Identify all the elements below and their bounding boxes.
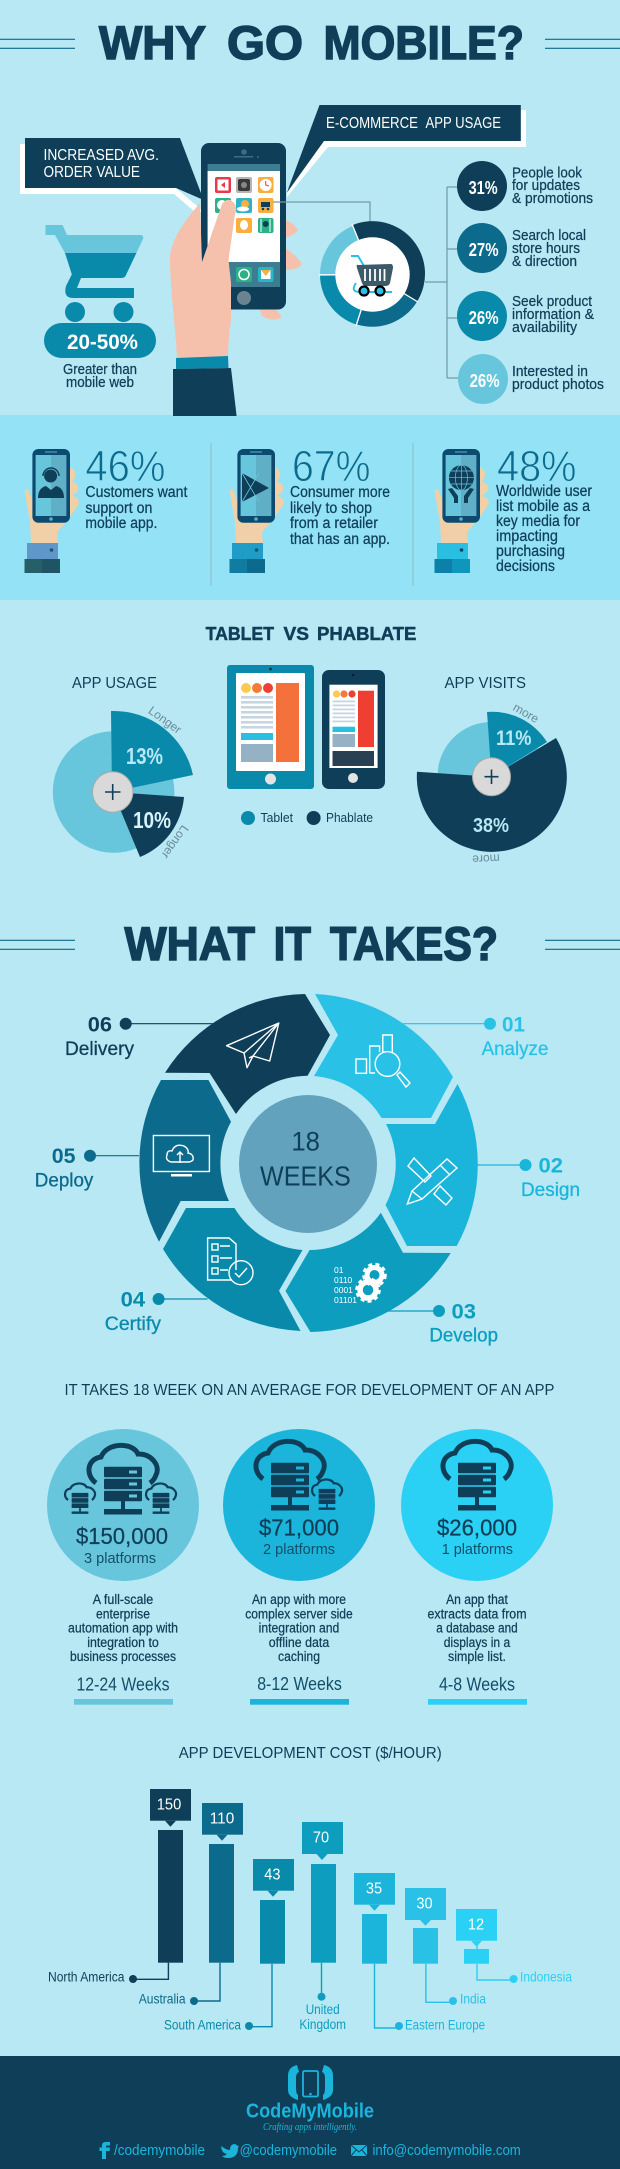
text: 48% worldwide user: key media for bbox=[496, 513, 580, 530]
bar: australia 110 bbox=[139, 1803, 243, 2007]
label: 06 delivery: Delivery bbox=[65, 1039, 135, 1060]
text: 48% worldwide user bbox=[496, 442, 592, 575]
text: 48% worldwide user: 48% bbox=[497, 442, 576, 491]
bar: eastern europe 35 bbox=[354, 1873, 485, 2033]
icon: hand with play phone bbox=[230, 449, 284, 573]
label: 06 delivery bbox=[65, 1014, 214, 1060]
bar: india 30: India bbox=[460, 1992, 486, 2007]
logo: codemymobile bbox=[246, 2065, 374, 2133]
label: 05 deploy: Deploy bbox=[35, 1171, 94, 1192]
bar: india 30 bbox=[405, 1888, 486, 2007]
description: complex server side: offline data bbox=[269, 1635, 330, 1650]
icon: three cloud servers bbox=[65, 1445, 176, 1514]
app icons bbox=[215, 177, 274, 282]
text: 48% worldwide user: decisions bbox=[496, 558, 555, 575]
stat: 31% updates: 31% bbox=[469, 178, 498, 198]
chart: app usage pie: Longer bbox=[146, 703, 184, 737]
stat: 26% product photos: Interested in bbox=[512, 363, 588, 380]
description: complex server side: caching bbox=[278, 1649, 320, 1664]
text: 67% consumer more likely: 67% bbox=[292, 442, 370, 491]
bar: south america 43: South America bbox=[164, 2018, 241, 2033]
chart: cost per hour bars bbox=[48, 1789, 572, 2033]
stat: 26% product photos: product photos bbox=[512, 376, 604, 393]
card: 2 platforms: $71,000 bbox=[259, 1515, 339, 1541]
text: 48% worldwide user: purchasing bbox=[496, 543, 565, 560]
text: 46% customers want support: Customers want bbox=[85, 484, 188, 501]
heading: app visits: APP VISITS bbox=[444, 675, 526, 692]
description: extracts data: simple list. bbox=[448, 1649, 506, 1664]
description: extracts data bbox=[428, 1592, 526, 1664]
chart: app usage pie: 13% bbox=[126, 743, 163, 769]
text: 67% consumer more likely: likely to shop bbox=[290, 500, 372, 517]
title: why go mobile: WHY bbox=[99, 16, 206, 69]
segment: deploy bbox=[139, 1080, 231, 1242]
text: greater than mobile web: Greater than bbox=[63, 362, 137, 378]
segment: develop: 0001 bbox=[334, 1285, 353, 1295]
description: full-scale app bbox=[68, 1592, 178, 1664]
label: 04 certify bbox=[105, 1289, 208, 1335]
card: 1 platform: 1 platforms bbox=[442, 1541, 513, 1558]
bar: north america 150 bbox=[48, 1789, 191, 1985]
label: 03 develop: Develop bbox=[429, 1326, 498, 1347]
contact: email: info@codemymobile.com bbox=[372, 2142, 521, 2159]
phone bbox=[201, 143, 286, 310]
chart: e-commerce donut bbox=[319, 221, 425, 327]
section: development time and cost bbox=[47, 1382, 572, 2033]
text: 48% worldwide user: impacting bbox=[496, 528, 558, 545]
logo: codemymobile: CodeMyMobile bbox=[246, 2100, 374, 2122]
stat: 31% updates: for updates bbox=[512, 177, 580, 194]
contact: twitter: @codemymobile bbox=[240, 2142, 337, 2159]
logo: codemymobile: Crafting apps intelligently. bbox=[263, 2122, 357, 2133]
chart: app visits pie: more bbox=[511, 700, 542, 726]
bar: india 30: 30 bbox=[416, 1895, 433, 1912]
stat: 26% product info bbox=[457, 291, 594, 341]
bar: united kingdom 70: 70 bbox=[313, 1829, 329, 1846]
legend: tablet and phablate: Tablet bbox=[260, 810, 293, 825]
stat: 27% store hours: 27% bbox=[469, 240, 499, 260]
icon: plus hub bbox=[472, 758, 510, 796]
sleeve bbox=[173, 356, 236, 415]
label: 01 analyze: 01 bbox=[502, 1014, 525, 1037]
bar: south america 43: 43 bbox=[264, 1866, 281, 1883]
pill: 20-50% bbox=[44, 323, 156, 358]
icon: hand with globe phone bbox=[434, 449, 489, 573]
duration: 8-12 weeks bbox=[250, 1674, 349, 1705]
chart: process wheel bbox=[139, 994, 478, 1332]
label: 03 develop bbox=[386, 1301, 498, 1347]
callout: e-commerce app usage: APP USAGE bbox=[426, 115, 501, 132]
center: 18 weeks: 18 bbox=[291, 1127, 320, 1157]
segment: delivery bbox=[165, 994, 330, 1114]
label: 02 design: 02 bbox=[538, 1155, 563, 1178]
text: greater than mobile web bbox=[63, 362, 137, 391]
callout: increased avg order value: INCREASED AVG. bbox=[44, 147, 159, 164]
stat: 26% product info: Seek product bbox=[512, 293, 593, 310]
section: tablet vs phablate bbox=[53, 623, 567, 867]
card: 1 platform bbox=[401, 1429, 553, 1705]
stat: 27% store hours: Search local bbox=[512, 227, 586, 244]
icon: one cloud server bbox=[443, 1441, 511, 1510]
icon: hand with support phone bbox=[24, 449, 79, 573]
stat panel: 48% bbox=[434, 442, 592, 575]
center: 18 weeks bbox=[239, 1095, 377, 1233]
chart: app usage pie bbox=[53, 703, 193, 861]
chart: app usage pie: 10% bbox=[133, 807, 171, 833]
card: 1 platform: $26,000 bbox=[437, 1515, 517, 1541]
stat: 27% store hours bbox=[457, 223, 586, 273]
bar: indonesia 12: Indonesia bbox=[520, 1970, 572, 1985]
card: 2 platforms: 2 platforms bbox=[263, 1541, 335, 1558]
callout: e-commerce app usage: E-COMMERCE bbox=[326, 115, 418, 132]
bar: australia 110: Australia bbox=[139, 1992, 186, 2007]
description: extracts data: An app that bbox=[446, 1592, 508, 1607]
description: extracts data: a database and bbox=[436, 1621, 518, 1636]
text: 46% customers want support bbox=[85, 442, 188, 532]
label: 02 design bbox=[476, 1155, 580, 1201]
chart: app usage pie: Longer bbox=[159, 823, 191, 861]
icon: plus hub bbox=[92, 772, 133, 812]
segment: develop bbox=[286, 1213, 451, 1332]
stat: 26% product photos bbox=[458, 354, 604, 404]
segment: analyze bbox=[314, 994, 453, 1118]
text: 48% worldwide user: Worldwide user bbox=[496, 483, 592, 500]
stat: 31% updates bbox=[457, 161, 593, 211]
description: complex server side: integration and bbox=[259, 1621, 339, 1636]
title: what it takes: TAKES? bbox=[330, 917, 498, 970]
title: why go mobile bbox=[99, 16, 524, 69]
label: 01 analyze bbox=[403, 1014, 548, 1060]
icon: hand holding phone bbox=[170, 143, 302, 415]
segment: design bbox=[386, 1084, 478, 1246]
heading: tablet vs phablate bbox=[206, 623, 416, 644]
center: 18 weeks: WEEKS bbox=[260, 1161, 351, 1192]
bar: united kingdom 70: Kingdom bbox=[299, 2017, 346, 2032]
chart: app visits pie: 11% bbox=[496, 727, 532, 750]
text: 67% consumer more likely: Consumer more bbox=[290, 484, 390, 501]
duration: 12-24 weeks: 12-24 Weeks bbox=[76, 1675, 170, 1695]
label: 02 design: Design bbox=[521, 1180, 580, 1201]
bar: south america 43 bbox=[164, 1859, 294, 2033]
description: full-scale app: enterprise bbox=[96, 1606, 150, 1621]
callout: increased avg order value: ORDER VALUE bbox=[44, 164, 140, 181]
chart: app visits pie: more bbox=[472, 851, 500, 867]
description: complex server side bbox=[245, 1592, 353, 1664]
card: 3 platforms: $150,000 bbox=[76, 1523, 168, 1549]
title: what it takes bbox=[124, 917, 498, 970]
card: 3 platforms bbox=[47, 1429, 199, 1705]
label: 01 analyze: Analyze bbox=[482, 1039, 548, 1060]
band: mobile stats bbox=[0, 415, 620, 600]
description: full-scale app: A full-scale bbox=[93, 1592, 153, 1607]
bar: australia 110: 110 bbox=[210, 1810, 234, 1827]
text: 67% consumer more likely: from a retailer bbox=[290, 515, 378, 532]
description: complex server side: An app with more bbox=[252, 1592, 346, 1607]
segment: develop: 01101 bbox=[334, 1295, 357, 1305]
stat: 26% product info: 26% bbox=[469, 308, 499, 328]
icon: shopping cart bbox=[46, 225, 143, 322]
title: why go mobile: MOBILE? bbox=[324, 16, 524, 69]
description: complex server side: complex server side bbox=[245, 1606, 353, 1621]
description: extracts data: displays in a bbox=[444, 1635, 511, 1650]
title: why go mobile: GO bbox=[227, 16, 303, 69]
duration: 12-24 weeks bbox=[74, 1675, 173, 1705]
contact: facebook: /codemymobile bbox=[114, 2142, 205, 2159]
duration: 8-12 weeks: 8-12 Weeks bbox=[257, 1674, 342, 1694]
label: 05 deploy bbox=[35, 1145, 139, 1192]
chart: app visits pie: 38% bbox=[473, 815, 509, 837]
bar: indonesia 12: 12 bbox=[468, 1916, 484, 1933]
legend: tablet and phablate: Phablate bbox=[326, 810, 373, 825]
heading: tablet vs phablate: TABLET bbox=[206, 623, 275, 644]
bar: united kingdom 70: United bbox=[306, 2002, 340, 2017]
stat: 31% updates: People look bbox=[512, 164, 582, 182]
stat panel: 67% bbox=[230, 442, 390, 573]
description: full-scale app: business processes bbox=[70, 1649, 176, 1664]
label: 06 delivery: 06 bbox=[88, 1014, 112, 1037]
description: full-scale app: integration to bbox=[87, 1635, 159, 1650]
bar: indonesia 12 bbox=[456, 1909, 572, 1985]
label: 04 certify: Certify bbox=[105, 1314, 161, 1335]
bar: north america 150: 150 bbox=[157, 1796, 181, 1813]
title: what it takes: WHAT bbox=[124, 917, 255, 970]
icon: phablet bbox=[322, 670, 385, 789]
hand bbox=[170, 200, 236, 358]
section: why go mobile bbox=[0, 16, 620, 415]
callout: increased avg order value bbox=[20, 138, 204, 212]
pill: 20-50%: 20-50% bbox=[67, 331, 138, 354]
heading: app usage: APP USAGE bbox=[72, 675, 157, 692]
segment: develop: 01 bbox=[334, 1265, 344, 1275]
bar: north america 150: North America bbox=[48, 1970, 125, 1985]
segment: develop: 0110 bbox=[334, 1275, 353, 1285]
chart: app visits pie bbox=[417, 700, 567, 867]
description: full-scale app: automation app with bbox=[68, 1621, 178, 1636]
icon: cart in donut bbox=[351, 256, 393, 296]
heading: app development cost: APP DEVELOPMENT COST ($/HOUR) bbox=[179, 1745, 442, 1762]
bar: united kingdom 70 bbox=[299, 1822, 346, 2032]
stat: 27% store hours: store hours bbox=[512, 240, 580, 257]
bar: eastern europe 35: Eastern Europe bbox=[405, 2018, 485, 2033]
callout: e-commerce app usage bbox=[287, 105, 526, 197]
label: 04 certify: 04 bbox=[121, 1289, 145, 1312]
text: greater than mobile web: mobile web bbox=[66, 375, 134, 391]
stat panel: 46% bbox=[24, 442, 188, 573]
text: 67% consumer more likely bbox=[290, 442, 390, 548]
section: what it takes bbox=[0, 917, 620, 1347]
fingers behind phone bbox=[258, 220, 302, 320]
description: extracts data: extracts data from bbox=[428, 1606, 526, 1621]
icon: tablet bbox=[227, 665, 314, 789]
text: 46% customers want support: mobile app. bbox=[85, 515, 157, 532]
heading: tablet vs phablate: PHABLATE bbox=[317, 623, 416, 644]
text: 48% worldwide user: list mobile as a bbox=[496, 498, 590, 515]
stat: 26% product info: information & bbox=[512, 306, 594, 323]
heading: average development: IT TAKES 18 WEEK ON AN AVERAGE FOR DEVELOPMENT OF AN APP bbox=[64, 1382, 554, 1399]
text: 46% customers want support: 46% bbox=[85, 442, 165, 491]
duration: 4-8 weeks bbox=[428, 1675, 527, 1705]
stat: 27% store hours: & direction bbox=[512, 253, 577, 270]
heading: tablet vs phablate: VS bbox=[284, 623, 309, 644]
label: 05 deploy: 05 bbox=[52, 1145, 76, 1168]
segment: certify bbox=[163, 1208, 302, 1331]
text: 46% customers want support: support on bbox=[85, 500, 152, 517]
label: 03 develop: 03 bbox=[452, 1301, 476, 1324]
stat: 31% updates: & promotions bbox=[512, 190, 593, 207]
text: 67% consumer more likely: that has an app. bbox=[290, 531, 390, 548]
card: 2 platforms bbox=[223, 1429, 375, 1705]
card: 3 platforms: 3 platforms bbox=[84, 1550, 156, 1567]
title: what it takes: IT bbox=[274, 917, 311, 970]
stat: 26% product info: availability bbox=[512, 319, 577, 336]
duration: 4-8 weeks: 4-8 Weeks bbox=[439, 1675, 515, 1695]
icon: two cloud servers bbox=[256, 1441, 342, 1510]
bar: eastern europe 35: 35 bbox=[366, 1880, 382, 1897]
legend: tablet and phablate bbox=[241, 810, 373, 825]
stat: 26% product photos: 26% bbox=[470, 371, 500, 391]
footer bbox=[0, 2056, 620, 2169]
